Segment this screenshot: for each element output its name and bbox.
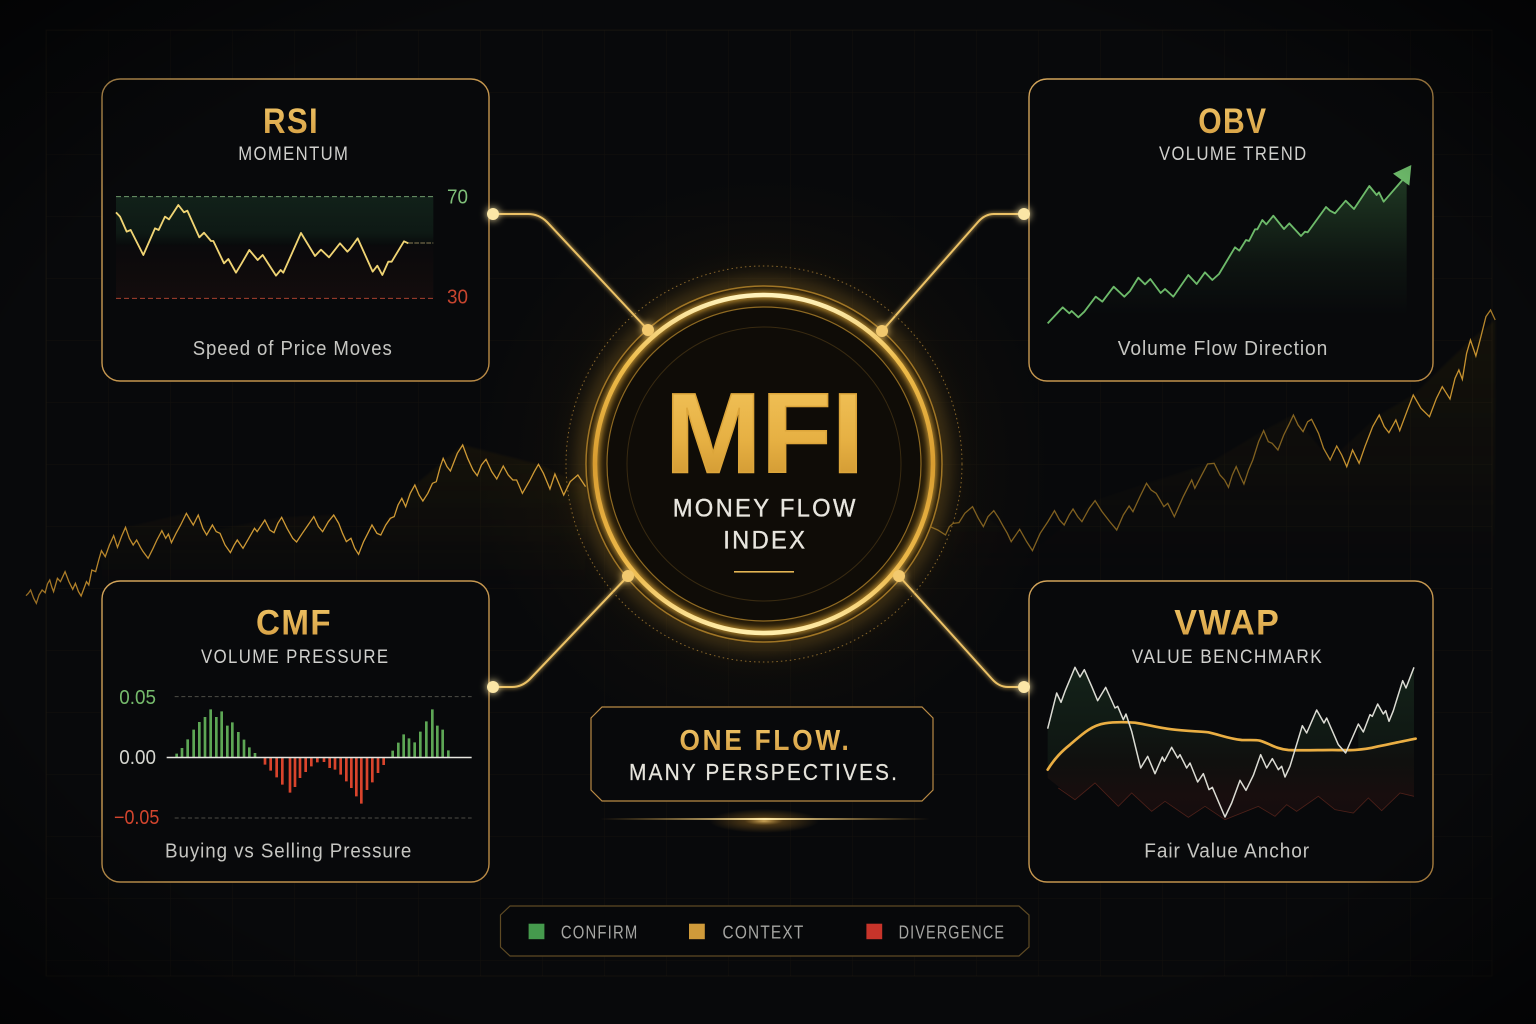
glowing divider — [600, 809, 930, 833]
node: bottom-right — [893, 570, 905, 582]
legend item: context: CONTEXT — [722, 922, 804, 942]
VWAP price and average chart — [1048, 667, 1416, 820]
heading: CMF: CMF — [256, 604, 332, 643]
caption: Buying vs Selling Pressure — [165, 839, 412, 862]
icon: up arrow head — [1393, 165, 1411, 186]
connector lines — [493, 214, 1024, 687]
tagline box — [591, 707, 933, 801]
panel: VWAP — [1029, 581, 1433, 882]
subheading: momentum: MOMENTUM — [238, 143, 349, 165]
tagline line 2: MANY PERSPECTIVES. — [629, 759, 899, 785]
axis label -0.05: −0.05 — [114, 807, 159, 829]
subtitle Money Flow Index — [673, 495, 858, 554]
caption: Fair Value Anchor — [1144, 839, 1310, 862]
OBV area chart with arrow — [1048, 165, 1411, 323]
axis label 0.00: 0.00 — [119, 747, 156, 769]
caption: Speed of Price Moves — [193, 337, 393, 360]
axis label 70: 70 — [447, 186, 468, 208]
legend item: divergence: DIVERGENCE — [899, 922, 1005, 942]
node: top-left — [642, 324, 654, 336]
panel: CMF — [102, 581, 489, 882]
node: CMF card connector — [487, 681, 499, 693]
node: VWAP card connector — [1018, 681, 1030, 693]
legend — [500, 906, 1029, 956]
axis label 0.05: 0.05 — [119, 687, 156, 709]
legend item: context — [689, 922, 804, 942]
tagline line 1: ONE FLOW. — [680, 725, 852, 757]
node: top-right — [876, 325, 888, 337]
panel: RSI — [102, 79, 489, 381]
legend item: divergence — [866, 922, 1005, 942]
legend item: confirm: CONFIRM — [561, 922, 638, 942]
node: OBV card connector — [1018, 208, 1030, 220]
subtitle Money Flow Index: MONEY FLOW — [673, 495, 858, 523]
RSI line chart — [116, 186, 468, 308]
panel: OBV — [1029, 79, 1433, 381]
subheading: value benchmark: VALUE BENCHMARK — [1132, 646, 1323, 668]
heading: VWAP: VWAP — [1174, 604, 1280, 643]
background price line: right — [930, 310, 1495, 580]
heading: RSI: RSI — [263, 102, 319, 141]
main title MFI: MFI — [665, 371, 864, 498]
legend item: confirm — [529, 922, 638, 942]
emblem underline — [734, 571, 794, 573]
central MFI emblem — [566, 266, 962, 662]
node: bottom-left — [622, 570, 634, 582]
subheading: volume trend: VOLUME TREND — [1159, 143, 1308, 165]
caption: Volume Flow Direction — [1118, 337, 1328, 360]
heading: OBV: OBV — [1198, 102, 1267, 141]
subheading: volume pressure: VOLUME PRESSURE — [201, 646, 390, 668]
subtitle Money Flow Index: INDEX — [723, 526, 807, 554]
background price line: left — [26, 445, 586, 603]
CMF bar chart — [114, 687, 472, 829]
node: RSI card connector — [487, 208, 499, 220]
axis label 30: 30 — [447, 286, 468, 308]
